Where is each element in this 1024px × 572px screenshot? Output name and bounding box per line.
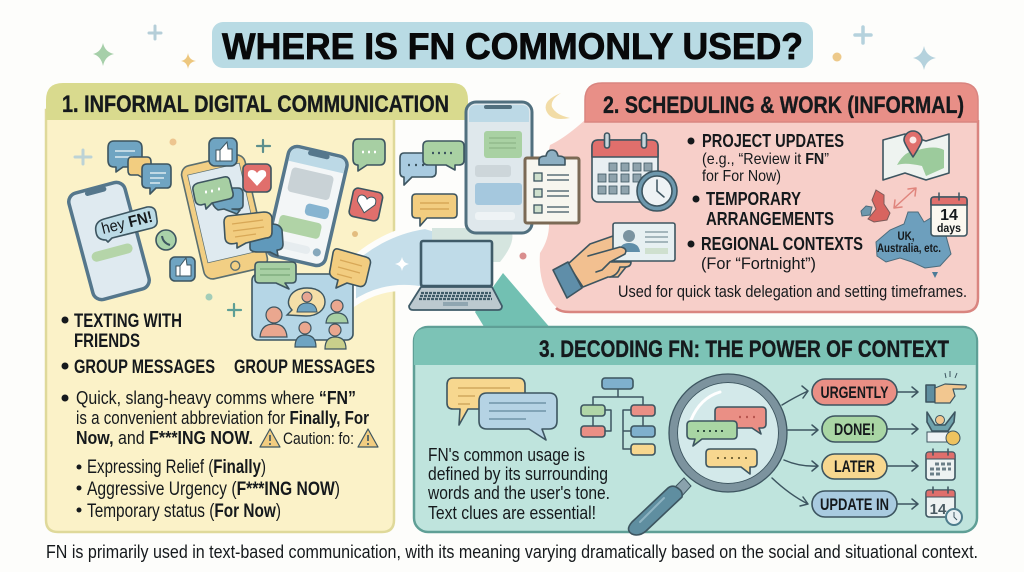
icon: 14 calendar with clock: 14 [930, 501, 947, 518]
icon: 14 calendar with clock [926, 487, 962, 525]
icon: blue and green bubbles [400, 141, 464, 185]
chip: later [822, 454, 887, 479]
icon: caution triangles [260, 429, 378, 447]
text block: slang description: Quick, slang-heavy comms where “FN” [76, 387, 356, 408]
text block: slang description: is a convenient abbreviation for Finally, For [76, 407, 369, 428]
chip: done: DONE! [834, 420, 875, 439]
connector swoosh [353, 226, 552, 330]
arrows from magnifier [772, 386, 918, 509]
text block: slang description: Caution: fo: [283, 429, 354, 448]
bullet list: project updates [688, 131, 844, 185]
bullet list: meanings: Expressing Relief (Finally) [87, 457, 266, 478]
icon: Australia map: UK, [898, 229, 914, 243]
icon: yellow phone bubbles [193, 177, 243, 214]
icon: blue chat bubble [250, 224, 283, 256]
icon: magnifying glass [628, 374, 787, 535]
icon: laptop [409, 241, 502, 310]
bullet list: regional contexts: (For “Fortnight”) [701, 254, 816, 273]
panel 1 body [46, 110, 394, 532]
text block: context explanation: FN's common usage is [428, 444, 585, 465]
icon: calendar with clock [592, 133, 677, 211]
bullet list: channels: GROUP MESSAGES [74, 357, 215, 378]
icon: UK and arrow [861, 188, 916, 222]
text block: context explanation [427, 444, 610, 523]
bullet list: temporary arrangements [692, 189, 834, 229]
bullet list: meanings: Temporary status (For Now) [87, 501, 281, 522]
icon: yellow bubble [412, 194, 457, 226]
icon: heart square [243, 164, 271, 192]
icon: clipboard checklist [525, 150, 579, 223]
icon: yellow bubble lower right [330, 249, 370, 288]
chip: update in: UPDATE IN [820, 495, 889, 514]
bullet list: regional contexts: REGIONAL CONTEXTS [701, 234, 863, 254]
bullet list: channels: FRIENDS [74, 331, 140, 352]
text block: slang description: Now, and F***ING NOW. [76, 427, 253, 448]
chip: urgently: URGENTLY [820, 383, 889, 402]
icon: Australia map [876, 212, 951, 278]
icon: flowchart [581, 378, 655, 455]
icon: later calendar [926, 449, 955, 480]
decorative sparkles top right [832, 27, 936, 70]
icon: celebrating person [927, 412, 960, 445]
bullet list: project updates: for For Now) [702, 168, 781, 185]
text block: context explanation: words and the user's tone. [427, 482, 610, 503]
decorative sparkles top left [93, 26, 196, 69]
icon: plus and dots in panel 1 [75, 138, 358, 316]
bullet list: channels: TEXTING WITH [74, 311, 182, 332]
icon: blue phone [265, 145, 349, 267]
group bubble [287, 288, 325, 316]
icon: yellow phone [180, 153, 269, 281]
bullet list: project updates: PROJECT UPDATES [702, 131, 844, 151]
icon: center phone [466, 102, 532, 233]
icon: heart square tilted [348, 187, 384, 222]
icon: hey FN bubble: hey FN! [100, 209, 154, 238]
icon: group video call [252, 274, 353, 349]
icon: 14 days calendar: days [937, 223, 961, 235]
bullet list: project updates: (e.g., “Review it FN” [702, 151, 829, 168]
panel 2: scheduling and work [540, 83, 978, 312]
bullet list: temporary arrangements: ARRANGEMENTS [706, 209, 834, 229]
icon: whatsapp badge [156, 230, 176, 250]
icon: yellow chat bubble [224, 212, 272, 248]
bullet list: meanings [76, 457, 340, 522]
icon: two speech bubbles [447, 378, 557, 440]
icon: message bubbles top left [108, 141, 171, 194]
title: WHERE IS FN COMMONLY USED? [222, 26, 803, 67]
bullet list: temporary arrangements: TEMPORARY [706, 189, 801, 209]
icon: green bubble lower [255, 262, 296, 289]
icon: Australia map: Australia, etc. [877, 241, 941, 255]
group people [260, 300, 348, 349]
panel 1 frame [46, 83, 468, 532]
text block: context explanation: defined by its surrounding [428, 463, 608, 484]
panel 1 header [46, 83, 468, 120]
chip: done [822, 416, 887, 442]
icon: thumbs up top [209, 138, 237, 166]
panel 3 body [414, 327, 977, 532]
bullet list: regional contexts [688, 234, 863, 273]
panel 3 header [414, 328, 976, 365]
panel 3: decoding FN [414, 327, 977, 535]
panel 1 content: informal digital communication [62, 91, 449, 522]
icon: pointing hand [926, 371, 966, 403]
icon: 14 days calendar [931, 193, 967, 236]
magnifier yellow bubble [706, 449, 757, 474]
icon: green bubble top right [353, 139, 385, 171]
icon: folded map with pin [883, 131, 949, 180]
panel 2 body [540, 120, 978, 312]
bullet list: channels [62, 311, 375, 378]
panel 1 heading: 1. INFORMAL DIGITAL COMMUNICATION [62, 91, 449, 118]
magnifier green bubble [687, 421, 737, 446]
moon icon [546, 93, 570, 119]
magnifier red bubble [715, 407, 766, 434]
chip: update in [812, 491, 897, 517]
bullet list: meanings: Aggressive Urgency (F***ING NOW) [87, 479, 340, 500]
text block: context explanation: Text clues are essential! [428, 502, 596, 523]
text block: slang description [62, 387, 369, 448]
chip: later: LATER [834, 457, 875, 476]
device cluster centre [400, 102, 579, 310]
chip: urgently [812, 379, 897, 405]
panel 2 header [585, 83, 978, 122]
icon: hey FN phone [67, 180, 151, 302]
panel 2 caption: Used for quick task delegation and setting timeframes. [618, 283, 967, 301]
icon: hand holding card [553, 223, 675, 298]
bullet list: channels: GROUP MESSAGES [234, 357, 375, 378]
icon: 14 days calendar: 14 [940, 207, 958, 224]
icon: thumb up lower [170, 257, 195, 281]
